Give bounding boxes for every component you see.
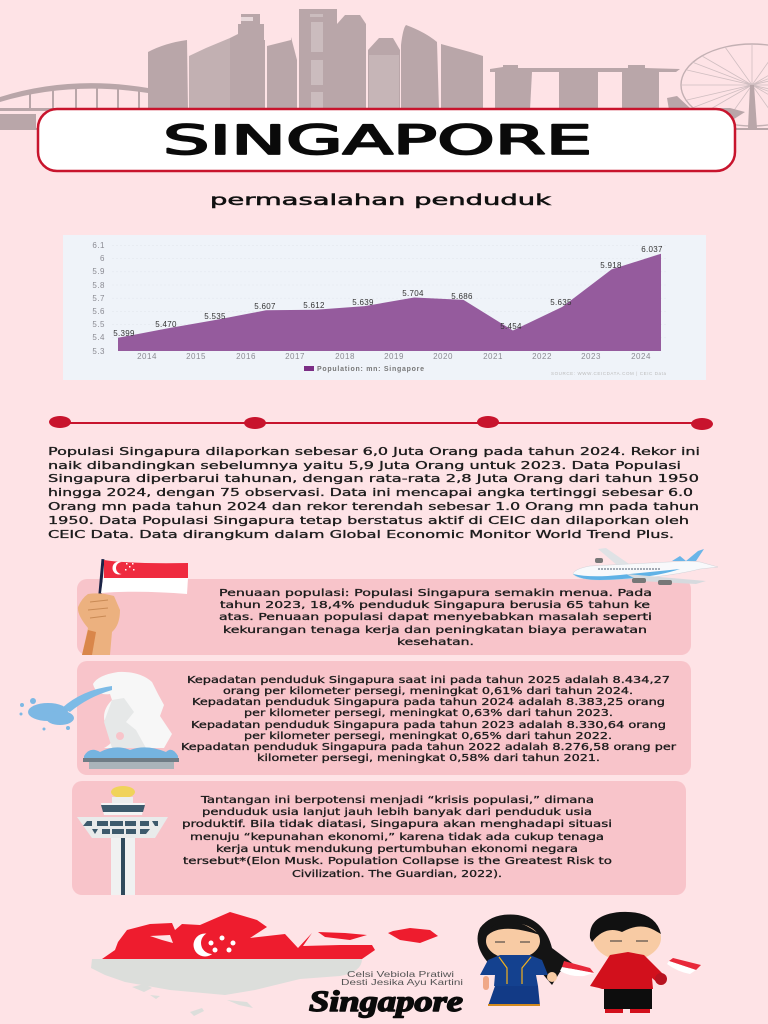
y axis labels: 5.3 xyxy=(92,347,105,356)
subtitle: permasalahan penduduk xyxy=(210,191,551,209)
data labels: 5.607 xyxy=(254,302,276,311)
small flag held by girl xyxy=(560,961,594,976)
y axis labels: 6 xyxy=(100,254,105,263)
data labels: 5.704 xyxy=(402,289,424,298)
legend: Population: mn: Singapore xyxy=(317,366,424,373)
x axis labels: 2021 xyxy=(483,352,503,361)
intro paragraph: CEIC Data. Data dirangkum dalam Global Economic Monitor World Trend Plus. xyxy=(48,530,674,541)
y axis labels: 5.4 xyxy=(92,333,105,342)
credits xyxy=(341,970,463,987)
x axis labels: 2023 xyxy=(581,352,601,361)
credits: Celsi Vebiola Pratiwi xyxy=(347,970,454,979)
source note: SOURCE: WWW.CEICDATA.COM | CEIC Data xyxy=(551,371,666,376)
y axis labels: 5.5 xyxy=(92,320,105,329)
data labels: 5.918 xyxy=(600,261,622,270)
y axis labels: 5.6 xyxy=(92,307,105,316)
density text: Kepadatan penduduk Singapura pada tahun 2023 adalah 8.330,64 orang xyxy=(191,720,666,731)
x axis labels: 2020 xyxy=(433,352,453,361)
character: boy in red shirt xyxy=(590,912,667,1013)
icon: airport control tower xyxy=(77,786,168,895)
data labels: 5.686 xyxy=(451,292,473,301)
density text: kilometer persegi, meningkat 0,58% dari tahun 2021. xyxy=(257,753,600,764)
area series xyxy=(118,254,661,351)
intro paragraph: Singapura diperbarui tahunan, dengan rata-rata 2,8 Juta Orang dari tahun 1950 xyxy=(48,474,699,485)
data labels: 5.470 xyxy=(155,320,177,329)
data labels: 5.399 xyxy=(113,329,135,338)
x axis labels: 2017 xyxy=(285,352,305,361)
intro paragraph: naik dibandingkan sebelumnya yaitu 5,9 Juta Orang untuk 2023. Data Populasi xyxy=(48,461,681,472)
crisis text xyxy=(182,795,612,880)
y axis labels: 5.8 xyxy=(92,281,105,290)
crisis text: produktif. Bila tidak diatasi, Singapura akan menghadapi situasi xyxy=(182,819,612,830)
intro paragraph: Populasi Singapura dilaporkan sebesar 6,0 Juta Orang pada tahun 2024. Rekor ini xyxy=(48,447,700,458)
water splash xyxy=(20,698,74,730)
crisis text: Civilization. The Guardian, 2022). xyxy=(292,869,502,880)
x axis labels: 2022 xyxy=(532,352,552,361)
crisis text: menuju “kepunahan ekonomi,” karena tidak ada cukup tenaga xyxy=(190,832,604,843)
script wordmark: Singapore xyxy=(309,985,463,1018)
x axis labels: 2018 xyxy=(335,352,355,361)
density text xyxy=(181,675,676,764)
x axis labels: 2024 xyxy=(631,352,651,361)
crisis text: Tantangan ini berpotensi menjadi “krisis populasi,” dimana xyxy=(200,795,594,806)
icon: airplane xyxy=(573,548,718,585)
icon: flag in hand xyxy=(78,559,188,655)
data labels: 5.454 xyxy=(500,322,522,331)
credits: Desti Jesika Ayu Kartini xyxy=(341,978,463,987)
density text: Kepadatan penduduk Singapura saat ini pada tahun 2025 adalah 8.434,27 xyxy=(187,675,670,686)
aging text: Penuaan populasi: Populasi Singapura semakin menua. Pada xyxy=(219,588,652,599)
intro paragraph: hingga 2024, dengan 75 observasi. Data ini mencapai angka tertinggi sebesar 6.0 xyxy=(48,488,693,499)
crisis text: penduduk usia lanjut jauh lebih banyak dari penduduk usia xyxy=(202,807,592,818)
y axis labels: 5.9 xyxy=(92,267,105,276)
data labels: 5.612 xyxy=(303,301,325,310)
aging text: kesehatan. xyxy=(397,637,474,648)
downtown towers xyxy=(148,9,483,110)
data labels: 5.535 xyxy=(204,312,226,321)
density text: Kepadatan penduduk Singapura pada tahun 2024 adalah 8.383,25 orang xyxy=(192,697,665,708)
icon: merlion fountain xyxy=(20,672,179,769)
title box xyxy=(38,109,735,171)
data labels xyxy=(113,245,663,338)
bridge xyxy=(0,83,768,130)
crisis text: kerja untuk mendukung pertumbuhan ekonomi negara xyxy=(216,844,578,855)
map of singapore in flag colours xyxy=(91,912,438,1016)
small flag held by boy xyxy=(667,958,701,974)
x axis labels: 2015 xyxy=(186,352,206,361)
data labels: 5.635 xyxy=(550,298,572,307)
data labels: 6.037 xyxy=(641,245,663,254)
x axis labels: 2019 xyxy=(384,352,404,361)
y axis labels: 6.1 xyxy=(92,241,105,250)
x axis labels xyxy=(137,352,651,361)
area chart: population xyxy=(63,235,706,380)
y axis labels xyxy=(92,241,105,356)
aging text: atas. Penuaan populasi dapat menyebabkan masalah seperti xyxy=(219,612,652,623)
crisis text: tersebut*(Elon Musk. Population Collapse is the Greatest Risk to xyxy=(183,856,612,867)
density text: orang per kilometer persegi, meningkat 0,61% dari tahun 2024. xyxy=(223,686,633,697)
density text: Kepadatan penduduk Singapura pada tahun 2022 adalah 8.276,58 orang per xyxy=(181,742,676,753)
aging text: tahun 2023, 18,4% penduduk Singapura berusia 65 tahun ke xyxy=(220,600,650,611)
panel: aging xyxy=(77,579,691,655)
density text: per kilometer persegi, meningkat 0,63% dari tahun 2023. xyxy=(244,708,613,719)
skyline illustration xyxy=(0,9,768,130)
ferris wheel xyxy=(667,44,768,128)
character: girl in traditional dress xyxy=(478,915,576,1006)
intro paragraph: Orang mn pada tahun 2024 dan rekor terendah sebesar 1.0 Orang mn pada tahun xyxy=(48,502,699,513)
data labels: 5.639 xyxy=(352,298,374,307)
divider timeline xyxy=(49,416,713,430)
x axis labels: 2014 xyxy=(137,352,157,361)
aging text xyxy=(219,588,652,648)
aging text: kekurangan tenaga kerja dan peningkatan biaya perawatan xyxy=(223,625,647,636)
intro paragraph xyxy=(48,447,700,541)
intro paragraph: 1950. Data Populasi Singapura tetap berstatus aktif di CEIC dan dilaporkan oleh xyxy=(48,516,689,527)
y axis labels: 5.7 xyxy=(92,294,105,303)
density text: per kilometer persegi, meningkat 0,65% dari tahun 2022. xyxy=(244,731,612,742)
water jet xyxy=(62,686,112,712)
title text: SINGAPORE xyxy=(163,118,592,164)
marina bay sands xyxy=(490,65,680,110)
panel: density xyxy=(77,661,691,775)
panel: population crisis xyxy=(72,781,686,895)
x axis labels: 2016 xyxy=(236,352,256,361)
